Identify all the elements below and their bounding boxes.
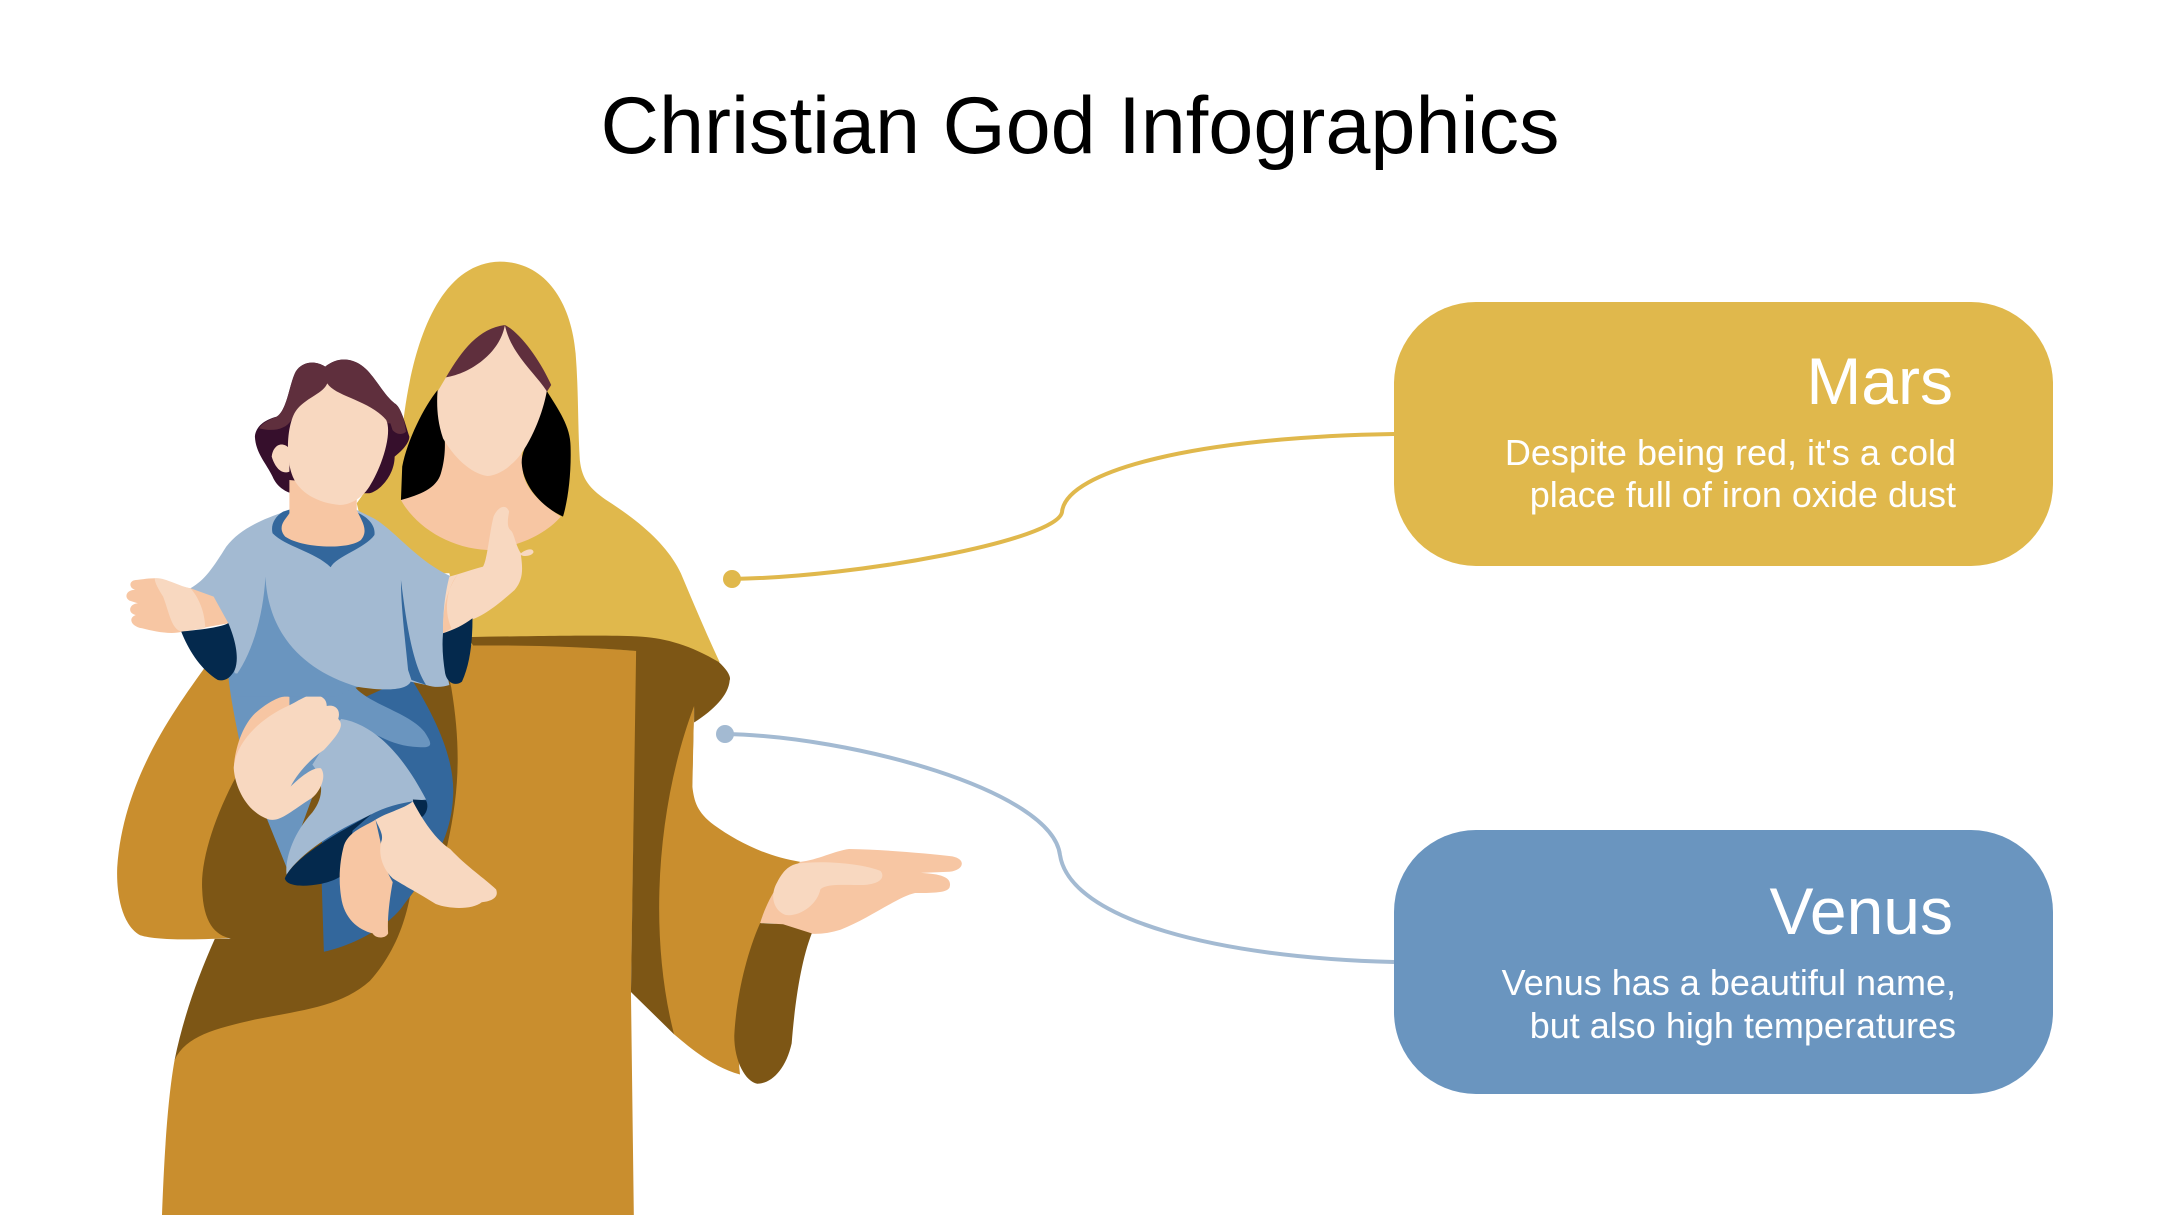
right hand xyxy=(760,849,962,934)
text: Mars description: Despite being red, it's a cold xyxy=(1505,432,1956,473)
child sleeves xyxy=(181,623,237,680)
mother supporting hand xyxy=(234,696,289,768)
child raised hand xyxy=(443,507,534,633)
hood xyxy=(357,262,720,673)
text: Mars description: place full of iron oxide dust xyxy=(1530,474,1956,515)
connector: Venus xyxy=(716,725,1394,962)
child left hand xyxy=(126,578,228,633)
child lower garment xyxy=(227,666,497,952)
child front foot xyxy=(376,801,497,908)
illustration: mother holding child xyxy=(117,262,962,1215)
title: Christian God Infographics xyxy=(600,81,1560,171)
panel: Venus xyxy=(1394,830,2053,1094)
mother head xyxy=(401,325,571,550)
panel: Mars xyxy=(1394,302,2053,566)
text: Venus description: Venus has a beautiful name, xyxy=(1502,962,1956,1003)
right sleeve cuff xyxy=(734,923,812,1084)
child upper body and head xyxy=(126,360,534,697)
child tunic xyxy=(190,510,450,689)
robe xyxy=(117,636,962,1215)
child back foot xyxy=(340,820,393,937)
heading: Venus: Venus xyxy=(1770,874,1953,948)
heading: Mars: Mars xyxy=(1806,344,1953,418)
connector: Mars xyxy=(723,434,1394,588)
text: Venus description: but also high temperatures xyxy=(1530,1005,1956,1046)
